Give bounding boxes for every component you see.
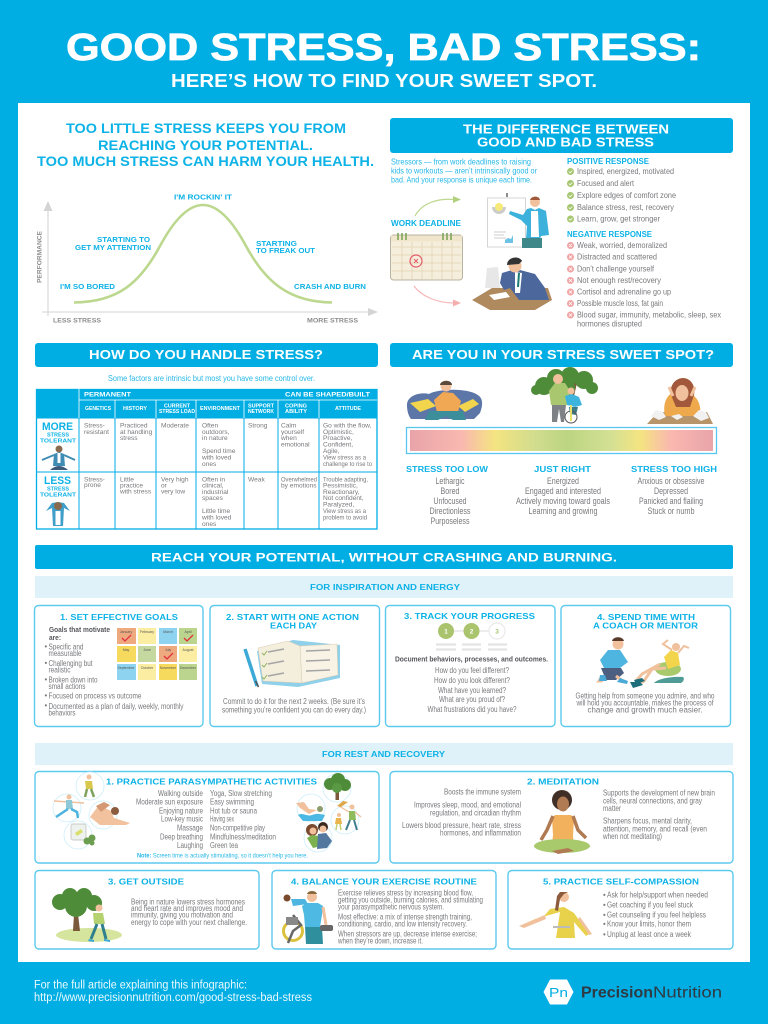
sub-banner: for inspiration and energy: FOR INSPIRATION AND ENERGY [310, 583, 461, 592]
row: more stress tolerant: Often [202, 422, 218, 430]
card: set effective goals: Goals that motivate [49, 625, 110, 634]
illustration: couple [304, 822, 332, 852]
card: track your progress: How do you feel different? [435, 666, 510, 675]
table header: ATTITUDE [335, 406, 362, 412]
chart: performance bell curve: LESS STRESS [53, 318, 101, 324]
illustration: man with dumbbell and bike rider [284, 891, 333, 944]
white content panel [18, 103, 750, 962]
sub-banner: for rest and recovery: FOR REST AND RECOVERY [322, 750, 446, 759]
icon: calendar [390, 233, 462, 280]
card: parasympathetic activities [35, 772, 379, 863]
intro text: Stressors — from work deadlines to raising [391, 158, 531, 166]
card: parasympathetic activities: Enjoying nature [159, 806, 203, 816]
card: meditation: matter [603, 804, 621, 813]
illustration: woman with open arms [519, 892, 592, 938]
row: less stress tolerant: Reactionary, [323, 489, 360, 496]
card: parasympathetic activities: Laughing [177, 841, 203, 850]
list: negative response: Don’t challenge yourself [577, 264, 655, 274]
row: more stress tolerant: with loved [201, 454, 232, 462]
card: set effective goals: 1. SET EFFECTIVE GOALS [60, 612, 179, 622]
chart: performance bell curve: TO FREAK OUT [256, 246, 316, 255]
row: more stress tolerant: yourself [281, 429, 304, 436]
chart: performance bell curve: I'M SO BORED [60, 282, 115, 291]
row: less stress tolerant: Overwhelmed [281, 476, 317, 484]
footer text: http://www.precisionnutrition.com/good-stress-bad-stress [34, 992, 312, 1004]
card: parasympathetic activities: Easy swimming [210, 798, 254, 806]
illustration: stressed man at desk [472, 258, 552, 310]
row: more stress tolerant: outdoors, [202, 429, 230, 436]
card: coach or mentor: 4. SPEND TIME WITH [597, 612, 695, 622]
illustration: sticky note calendar: November [160, 666, 177, 670]
row: more stress tolerant: when [280, 435, 297, 442]
row: less stress tolerant: Stress- [84, 476, 105, 484]
column: stress too low: Bored [440, 486, 460, 496]
card: start with one action [210, 606, 380, 726]
illustration: glass of water [64, 821, 96, 849]
card: set effective goals: • [44, 691, 48, 700]
card: balance exercise routine: when they’re down, increase it. [337, 936, 423, 946]
table header: ABILITY [285, 409, 308, 415]
list: positive response: Focused and alert [577, 179, 635, 188]
illustration: sticky note calendar: May [123, 648, 130, 652]
card: get outside: Being in nature lowers stress hormones [131, 898, 245, 906]
list: positive response: Explore edges of comfort zone [577, 191, 676, 200]
illustration: swimmer [296, 794, 325, 822]
column: stress too low: Lethargic [436, 476, 465, 486]
illustration: walker [76, 772, 104, 800]
table header: NETWORK [248, 409, 274, 415]
icon: progress steps: 3 [495, 628, 499, 636]
row: more stress tolerant: Confident, [323, 442, 353, 448]
column: stress too low: Directionless [430, 506, 471, 516]
list: negative response: hormones disrupted [577, 320, 642, 328]
illustration: person walking by tree [52, 888, 122, 942]
card: meditation: Lowers blood pressure, heart rate, stress [402, 821, 521, 830]
arrow: positive path [415, 196, 461, 216]
row: less stress tolerant: Trouble adapting, [323, 476, 368, 484]
illustration: family play [331, 801, 361, 834]
illustration: sticky note calendar [117, 628, 197, 680]
card: meditation: Improves sleep, mood, and emotional [414, 800, 521, 810]
card: balance exercise routine: Exercise relieves stress by increasing blood flow, [338, 888, 473, 898]
row: more stress tolerant: STRESS [47, 432, 69, 438]
row: more stress tolerant: challenge to rise to [323, 461, 372, 468]
title: GOOD STRESS, BAD STRESS: [66, 27, 701, 69]
row: less stress tolerant: by emotions [281, 482, 317, 490]
card: practice self-compassion: Unplug at least once a week [607, 930, 691, 939]
subtitle: HERE’S HOW TO FIND YOUR SWEET SPOT. [171, 71, 597, 91]
icon: meditating person [42, 446, 75, 470]
card: parasympathetic activities: Low-key music [161, 814, 203, 824]
card: meditation: Supports the development of new brain [603, 788, 715, 798]
footer text: For the full article explaining this infographic: [34, 980, 247, 992]
row: more stress tolerant: at handling [120, 429, 153, 436]
illustration: sticky note calendar: February [140, 630, 154, 634]
gradient stress scale [406, 428, 716, 454]
row: more stress tolerant: ones [202, 461, 217, 468]
chart: performance bell curve: I'M ROCKIN' IT [174, 192, 233, 202]
heading bar [35, 343, 378, 367]
row: more stress tolerant: Practiced [120, 422, 148, 430]
card: start with one action: 2. START WITH ONE ACTION [226, 612, 359, 622]
column: stress too high: Anxious or obsessive [638, 476, 704, 486]
row: more stress tolerant: Optimistic, [323, 429, 354, 436]
row: more stress tolerant: resistant [84, 429, 109, 436]
card: coach or mentor [561, 606, 730, 726]
column: just right [516, 465, 610, 516]
card: set effective goals: • [44, 658, 48, 668]
list: negative response [567, 230, 721, 328]
card: practice self-compassion: Get coaching if you feel stuck [607, 900, 693, 910]
card: meditation: regulation, and circadian rhythm [430, 808, 521, 818]
card: coach or mentor: Getting help from someone you admire, and who [576, 692, 715, 700]
heading: too little too much: REACHING YOUR POTENTIAL. [98, 138, 313, 153]
illustration: tree [323, 773, 351, 802]
card: get outside [35, 870, 259, 949]
card: track your progress: How do you look different? [434, 676, 511, 685]
section banner: reach your potential [35, 545, 733, 569]
row: less stress tolerant: practice [120, 482, 143, 490]
card: parasympathetic activities: Deep breathing [160, 832, 203, 842]
column: just right: Engaged and interested [525, 486, 601, 496]
card: track your progress [386, 606, 555, 726]
illustration: sticky note calendar: July [165, 648, 171, 652]
heading: too little too much: TOO LITTLE STRESS KEEPS YOU FROM [66, 121, 346, 136]
heading bar: ARE YOU IN YOUR STRESS SWEET SPOT? [412, 348, 714, 362]
row: less stress tolerant: Often in [202, 476, 225, 484]
card: practice self-compassion: Know your limits, honor them [607, 920, 691, 928]
illustration: sticky note calendar: December [180, 666, 197, 670]
card: set effective goals: Specific and [48, 642, 84, 652]
row: more stress tolerant: Strong [248, 422, 268, 430]
heading bar [390, 118, 733, 153]
icon: progress steps [436, 623, 507, 650]
illustration: coach and client [599, 637, 689, 688]
card: set effective goals: small actions [48, 682, 86, 691]
icon: progress steps: 1 [444, 628, 448, 636]
table header [84, 392, 370, 415]
row: more stress tolerant: View stress as a [323, 454, 366, 462]
row: more stress tolerant: in nature [202, 435, 228, 442]
list: positive response: POSITIVE RESPONSE [567, 157, 649, 166]
card: balance exercise routine: conditioning, cardio, and low intensity recovery. [338, 920, 467, 928]
table header: GENETICS [85, 406, 112, 412]
row: less stress tolerant: prone [84, 482, 101, 489]
sub-banner: for inspiration and energy [35, 576, 733, 598]
panel: difference between good and bad stress [390, 118, 733, 328]
card: coach or mentor: will hold you accountable, makes the process of [576, 698, 714, 708]
card: practice self-compassion: Ask for help/support when needed [607, 890, 708, 900]
card: set effective goals: realistic [48, 666, 71, 674]
table header: COPING [285, 404, 307, 410]
label: work deadline: WORK DEADLINE [391, 218, 461, 228]
card: meditation: Boosts the immune system [444, 788, 521, 796]
illustration: presenter at chart [488, 193, 549, 248]
row: more stress tolerant: Stress- [84, 422, 105, 430]
card: track your progress: 3. TRACK YOUR PROGRESS [404, 611, 536, 621]
row: less stress tolerant: problem to avoid [323, 514, 367, 522]
list: negative response: Distracted and scattered [577, 252, 657, 262]
list: negative response: NEGATIVE RESPONSE [567, 230, 652, 239]
table: stress tolerance [36, 389, 377, 529]
row: less stress tolerant: or [161, 482, 168, 490]
card: meditation: attention, memory, and recall (even [603, 824, 707, 834]
card: practice self-compassion: • [603, 920, 606, 928]
row: more stress tolerant: Agile, [323, 448, 340, 455]
logo: Precision Nutrition: Nutrition [653, 984, 722, 1002]
column: just right: Learning and growing [528, 506, 598, 516]
card: parasympathetic activities: Hot tub or sauna [210, 806, 258, 816]
row: less stress tolerant: Little time [202, 508, 231, 515]
illustration: father and child cycling under tree [531, 367, 598, 423]
card: meditation: when not meditating) [602, 832, 662, 841]
row: more stress tolerant: stress [120, 435, 138, 442]
card: parasympathetic activities: Walking outside [158, 789, 203, 798]
row: more stress tolerant [40, 421, 372, 470]
card: balance exercise routine [272, 870, 496, 949]
footer text [34, 980, 312, 1004]
card: track your progress: What have you learned? [438, 686, 507, 695]
table header: HISTORY [123, 406, 148, 412]
row: less stress tolerant: clinical, [202, 482, 224, 490]
illustration: sticky note calendar: October [141, 666, 154, 670]
illustration: massage [89, 801, 130, 829]
card: set effective goals: • [44, 701, 48, 710]
chart: performance bell curve: PERFORMANCE [36, 231, 44, 283]
column: just right: JUST RIGHT [534, 465, 591, 474]
card: set effective goals: behaviors [48, 708, 76, 718]
row: less stress tolerant: with loved [201, 514, 232, 522]
card: parasympathetic activities: 1. PRACTICE PARASYMPATHETIC ACTIVITIES [106, 776, 318, 786]
card: get outside: immunity, giving you motivation and [131, 910, 233, 920]
card: get outside: energy to cope with your next challenge. [131, 918, 247, 927]
arrow: negative path [414, 286, 461, 306]
sub-banner: for rest and recovery [35, 743, 733, 765]
heading bar: THE DIFFERENCE BETWEEN [463, 122, 669, 136]
card: start with one action: Commit to do it for the next 2 weeks. (Be sure it’s [223, 697, 365, 706]
heading: too little too much: TOO MUCH STRESS CAN HARM YOUR HEALTH. [37, 154, 374, 169]
card: parasympathetic activities: Having sex [210, 814, 234, 824]
column: stress too low: Purposeless [430, 516, 470, 526]
card: set effective goals: • [44, 675, 48, 684]
column: stress too low: STRESS TOO LOW [406, 465, 488, 474]
row: less stress tolerant: View stress as a [323, 508, 366, 515]
card: balance exercise routine: getting you outside, burning calories, and stimulating [338, 896, 483, 904]
illustration: sticky note calendar: January [120, 630, 132, 634]
card: track your progress: What are you proud of? [439, 695, 506, 704]
row: less stress tolerant: LESS [44, 475, 71, 487]
row: less stress tolerant: Paralyzed, [323, 502, 354, 508]
row: less stress tolerant: Little [120, 476, 134, 484]
illustration: sticky note calendar: April [184, 630, 192, 634]
card: meditation: cells, neural connections, and gray [603, 796, 702, 806]
card: get outside: 3. GET OUTSIDE [108, 876, 185, 886]
section banner: reach your potential: REACH YOUR POTENTIAL, WITHOUT CRASHING AND BURNING. [151, 550, 617, 564]
card: parasympathetic activities: Yoga, Slow stretching [210, 789, 272, 798]
table header: STRESS LOAD [159, 409, 195, 415]
card: start with one action: EACH DAY [270, 620, 318, 630]
card: meditation [390, 772, 733, 863]
panel: how do you handle stress [35, 343, 378, 529]
chart: performance bell curve: STARTING TO [97, 235, 150, 244]
card: coach or mentor: A COACH OR MENTOR [593, 620, 698, 630]
list: negative response: Weak, worried, demoralized [577, 241, 667, 250]
logo: Precision Nutrition [544, 980, 722, 1004]
heading: too little too much [37, 121, 374, 169]
table header: CURRENT [164, 404, 191, 410]
illustration: sticky note calendar: August [183, 648, 193, 652]
card: practice self-compassion: 5. PRACTICE SELF-COMPASSION [543, 876, 699, 886]
card: start with one action: something you’re confident you can do every day.) [222, 706, 366, 714]
illustration: sticky note calendar: September [117, 666, 135, 670]
card: practice self-compassion: • [603, 900, 606, 910]
card: practice self-compassion [508, 870, 733, 949]
row: less stress tolerant: Weak [248, 476, 265, 484]
column: stress too high: Stuck or numb [648, 506, 694, 516]
column: stress too high: Depressed [654, 486, 688, 496]
list: negative response: Blood sugar, immunity, metabolic, sleep, sex [577, 310, 721, 320]
illustration: sticky note calendar: June [143, 648, 151, 652]
list: negative response: Not enough rest/recovery [577, 276, 661, 285]
card: track your progress: What frustrations did you have? [428, 705, 517, 714]
row: more stress tolerant: Moderate [161, 422, 189, 430]
card: balance exercise routine: 4. BALANCE YOUR EXERCISE ROUTINE [291, 876, 478, 886]
row: less stress tolerant: spaces [202, 495, 224, 502]
row: more stress tolerant: Spend time [202, 448, 236, 455]
card: balance exercise routine: When stressors are up, decrease intense exercise; [338, 930, 477, 938]
logo: Precision Nutrition: Precision [581, 984, 653, 1002]
illustration: yoga [53, 794, 84, 822]
row: less stress tolerant: industrial [202, 489, 229, 496]
panel: stress sweet spot [390, 343, 733, 526]
illustration: notebook and pen [245, 640, 340, 687]
card: balance exercise routine: your parasympathetic nervous system. [338, 902, 444, 912]
logo: Precision Nutrition: Pn [549, 985, 568, 1000]
chart: performance bell curve: MORE STRESS [307, 318, 358, 324]
row: less stress tolerant: Not confident, [323, 495, 364, 502]
chart: performance bell curve: STARTING [256, 239, 297, 248]
chart: performance bell curve: GET MY ATTENTION [75, 243, 151, 252]
row: more stress tolerant: Calm [281, 422, 297, 430]
table header: SUPPORT [248, 404, 275, 410]
column: just right: Energized [547, 476, 579, 486]
card: parasympathetic activities: Non-competitive play [210, 824, 265, 832]
column: stress too high [631, 465, 717, 516]
heading bar: GOOD AND BAD STRESS [477, 136, 654, 150]
row: less stress tolerant: very low [161, 488, 185, 496]
card: set effective goals: Broken down into [48, 676, 98, 684]
row: less stress tolerant [40, 475, 368, 528]
card: set effective goals [34, 606, 203, 726]
row: more stress tolerant: Go with the flow, [323, 422, 372, 430]
icon: stressed person [46, 502, 70, 526]
illustration: sticky note calendar: March [163, 630, 173, 634]
list: positive response: Inspired, energized, motivated [577, 167, 674, 176]
card: practice self-compassion: • [603, 930, 606, 939]
heading bar: HOW DO YOU HANDLE STRESS? [89, 348, 323, 362]
list: negative response: Cortisol and adrenaline go up [577, 288, 672, 296]
column: stress too high: Panicked and flailing [639, 496, 703, 506]
card: track your progress: Document behaviors, processes, and outcomes. [395, 654, 548, 664]
row: more stress tolerant: emotional [281, 442, 310, 448]
row: less stress tolerant: Pessimistic, [323, 482, 358, 490]
row: less stress tolerant: Very high [161, 476, 189, 484]
illustration: overwhelmed woman at desk [647, 378, 713, 424]
list: positive response: Learn, grow, get stronger [577, 214, 660, 224]
card: meditation: 2. MEDITATION [527, 776, 599, 786]
icon: progress steps: 2 [470, 628, 474, 636]
card: set effective goals: Challenging but [48, 659, 93, 668]
card: parasympathetic activities: Massage [177, 824, 203, 832]
card: coach or mentor: change and growth much easier. [588, 706, 702, 714]
table header: ENVIRONMENT [200, 406, 241, 412]
table header: PERMANENT [84, 392, 131, 398]
illustration: meditating woman [534, 790, 590, 854]
row: less stress tolerant: TOLERANT [40, 492, 77, 498]
row: less stress tolerant: ones [202, 521, 217, 528]
card: practice self-compassion: • [603, 910, 606, 920]
row: less stress tolerant: STRESS [47, 486, 69, 492]
card: set effective goals: are: [49, 633, 61, 642]
card: practice self-compassion: • [603, 890, 606, 900]
card: set effective goals: measurable [48, 649, 82, 658]
heading bar [390, 343, 733, 367]
card: get outside: and heart rate and improves mood and [131, 904, 243, 913]
intro text [391, 158, 537, 184]
row: more stress tolerant: Proactive, [323, 435, 352, 442]
list: negative response: Possible muscle loss, fat gain [577, 299, 663, 308]
column: just right: Actively moving toward goals [516, 496, 610, 506]
illustration: person on couch [407, 380, 482, 420]
card: practice self-compassion: Get counseling if you feel helpless [607, 910, 706, 920]
row: more stress tolerant: TOLERANT [40, 438, 77, 444]
table header: CAN BE SHAPED/BUILT [285, 392, 370, 398]
row: more stress tolerant: MORE [42, 421, 73, 433]
card: parasympathetic activities: Green tea [210, 841, 239, 850]
note: Note: Screen time is actually stimulating, so it doesn’t help you here. [137, 852, 308, 860]
card: set effective goals: • [44, 642, 48, 651]
card: set effective goals: Documented as a plan of daily, weekly, monthly [48, 702, 184, 711]
intro text: bad. And your response is unique each time. [391, 176, 532, 184]
card: balance exercise routine: Most effective: a mix of intense strength training, [338, 912, 472, 922]
chart: performance bell curve [36, 192, 378, 324]
list: positive response: Balance stress, rest, recovery [577, 203, 674, 212]
column: stress too low: Unfocused [434, 496, 466, 506]
column: stress too high: STRESS TOO HIGH [631, 465, 717, 474]
chart: performance bell curve: CRASH AND BURN [294, 282, 366, 291]
intro text: kids to workouts — aren’t intrinsically good or [391, 166, 537, 176]
card: set effective goals: Focused on process vs outcome [48, 692, 142, 700]
list: positive response [567, 157, 676, 224]
card: parasympathetic activities: Moderate sun exposure [136, 798, 203, 806]
subheading: Some factors are intrinsic but most you have some control over. [108, 374, 315, 383]
panel: stress performance curve [36, 121, 378, 324]
row: less stress tolerant: with stress [119, 488, 152, 496]
card: parasympathetic activities: Mindfulness/meditation [210, 832, 276, 842]
column: stress too low [406, 465, 488, 526]
card: meditation: Sharpens focus, mental clarity, [603, 816, 692, 826]
card: meditation: hormones, and inflammation [440, 828, 521, 838]
